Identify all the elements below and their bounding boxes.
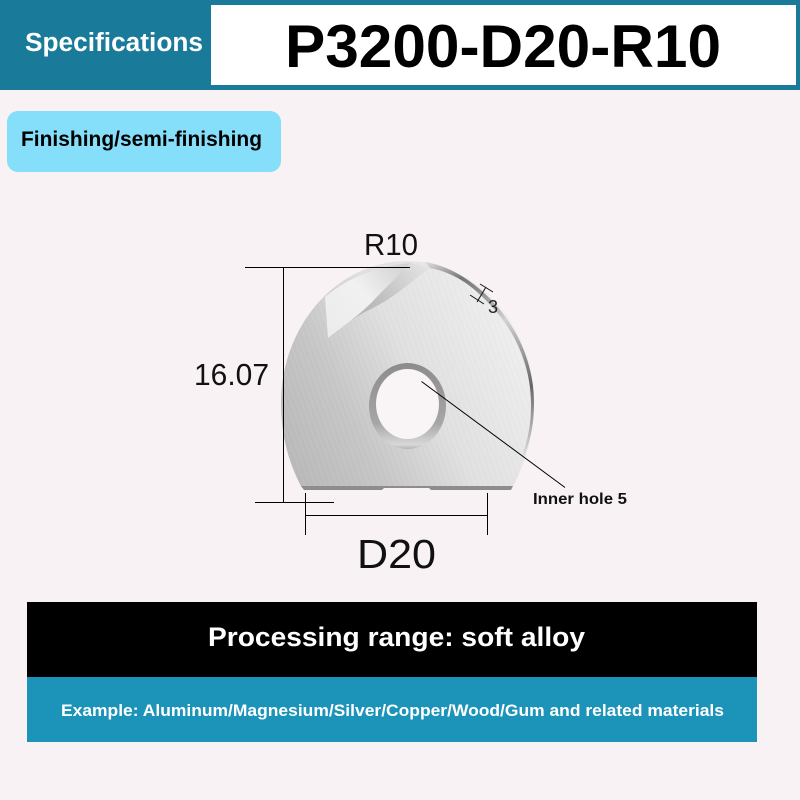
panel: processing range (27, 602, 757, 742)
header band (0, 0, 800, 90)
callout: inner hole 5 (422, 382, 627, 508)
diagram: ball-nose insert with dimensions (194, 227, 627, 577)
label: Specifications: Specifications (25, 29, 203, 57)
badge: finishing/semi-finishing: Finishing/semi-finishing (21, 127, 262, 151)
callout: inner hole 5: Inner hole 5 (533, 491, 627, 508)
centre hole (369, 363, 446, 449)
insert body (281, 261, 534, 490)
badge: finishing/semi-finishing (7, 111, 281, 172)
heading: processing range (27, 602, 757, 677)
title panel (211, 5, 796, 85)
dimension: R10: R10 (364, 227, 418, 262)
bottom edge (301, 486, 513, 490)
chip groove (328, 263, 430, 338)
dimension: 16.07 height: 16.07 (194, 357, 269, 392)
dimension: 16.07 height (194, 267, 410, 502)
dimension: D20 width (305, 493, 488, 577)
cutting edge rim (425, 262, 534, 463)
text: example materials (27, 677, 757, 742)
dimension: D20 width: D20 (357, 531, 436, 577)
dimension: 3 edge width: 3 (488, 297, 498, 317)
text: example materials: Example: Aluminum/Magnesium/Silver/Copper/Wood/Gum and related materials (61, 701, 724, 720)
heading: processing range: Processing range: soft alloy (208, 622, 585, 652)
dimension: 3 edge width (470, 284, 498, 317)
title: model number: P3200-D20-R10 (285, 13, 721, 80)
rake facet (325, 263, 410, 338)
